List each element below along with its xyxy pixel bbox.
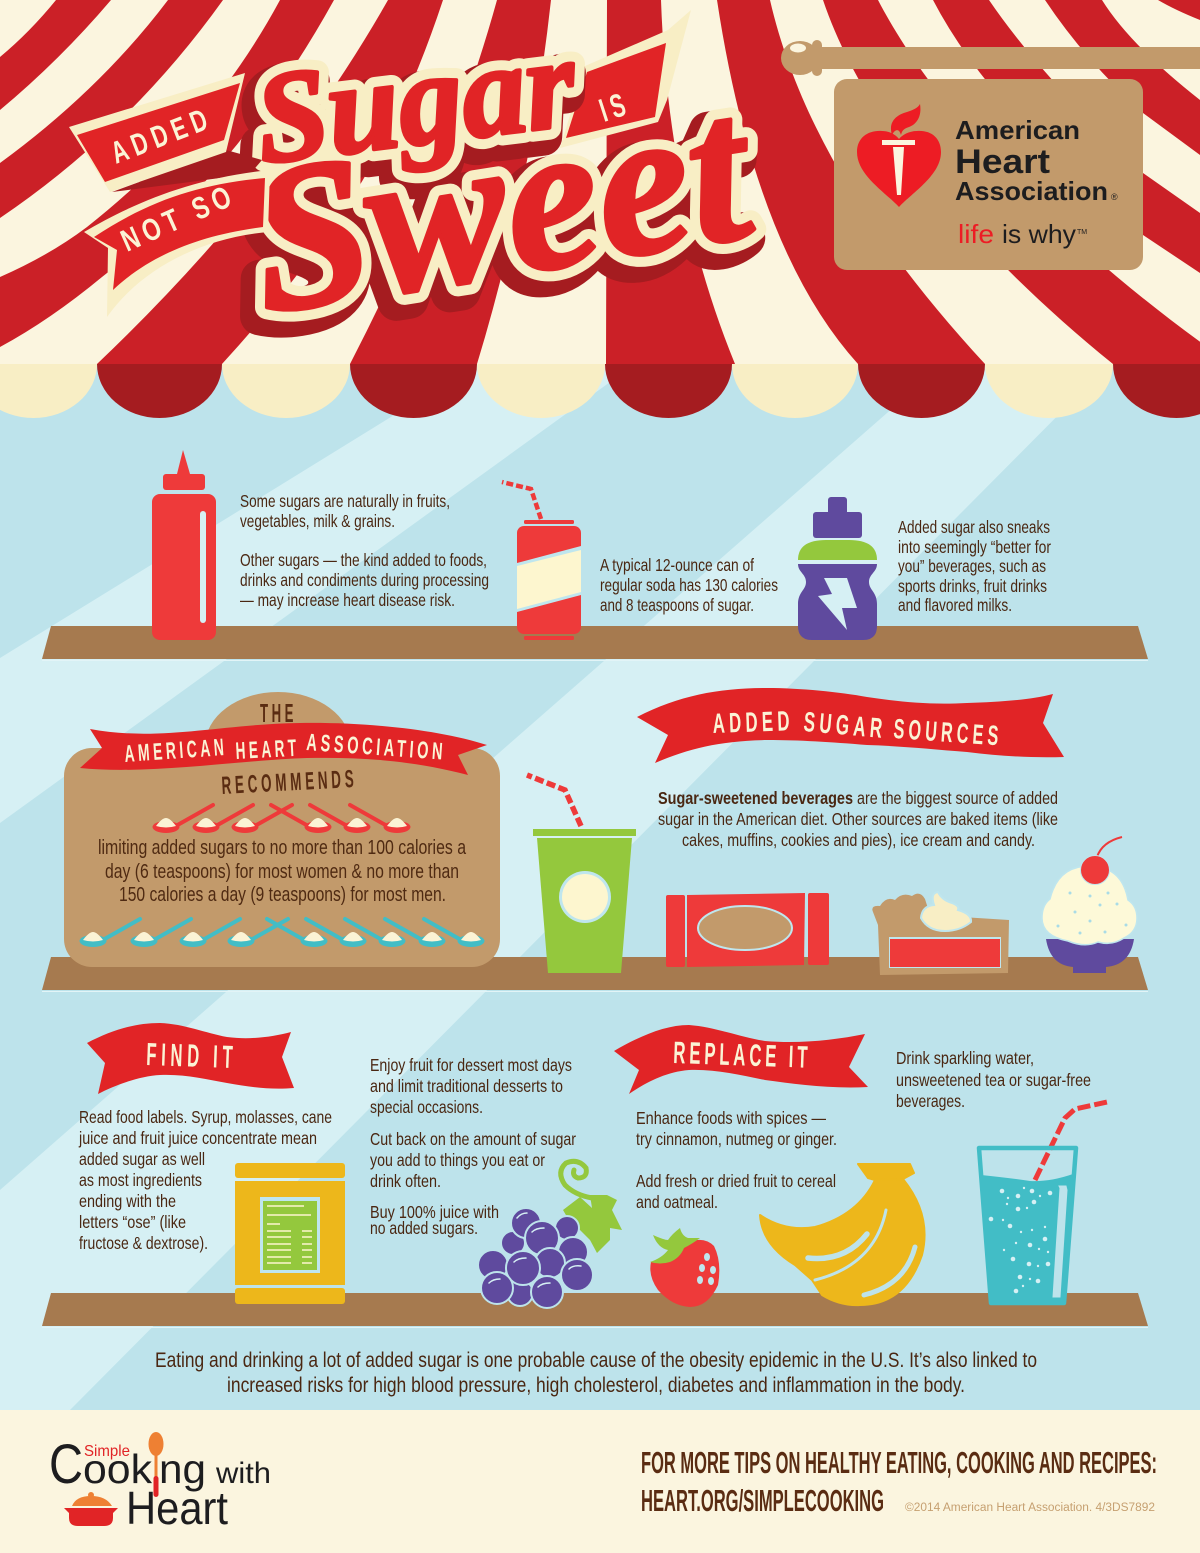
text: recommended limits: limiting added sugars to no more than 100 calories a bbox=[98, 837, 467, 859]
text: natural and other sugars: drinks and condiments during processing bbox=[240, 570, 489, 590]
call to action bbox=[641, 1445, 1157, 1518]
text: sparkling water: unsweetened tea or sugar-free bbox=[896, 1070, 1091, 1090]
text: fruit and juice tips: and limit traditional desserts to bbox=[370, 1076, 563, 1096]
banner: find it bbox=[87, 1023, 294, 1094]
copyright: ©2014 American Heart Association. 4/3DS7892 bbox=[905, 1502, 1155, 1514]
banner: added sugar sources: SUGAR bbox=[802, 706, 888, 744]
logo: simple cooking with heart bbox=[49, 1432, 271, 1534]
logo wordmark bbox=[955, 115, 1118, 206]
text: better for you beverages bbox=[898, 517, 1051, 615]
icon: ice cream sundae bbox=[1042, 837, 1137, 973]
text: sparkling water: beverages. bbox=[896, 1091, 965, 1111]
logo: simple cooking with heart: ng bbox=[159, 1446, 206, 1492]
text: natural and other sugars: vegetables, milk & grains. bbox=[240, 511, 395, 531]
heading: the: THE bbox=[260, 698, 297, 728]
text: replace it: and oatmeal. bbox=[636, 1192, 718, 1212]
logo wordmark: Association bbox=[955, 176, 1108, 206]
panel: American Heart Association sign bbox=[834, 79, 1143, 270]
awning: red and cream stripes bbox=[0, 0, 1200, 370]
banner: added: ADDED bbox=[106, 100, 217, 171]
icon: green cup with straw bbox=[527, 775, 636, 973]
logo: simple cooking with heart: Heart bbox=[126, 1482, 228, 1534]
ribbon: american heart association: HEART bbox=[235, 735, 300, 765]
icon: bananas bbox=[760, 1164, 925, 1305]
title: sugar sweet: Sugar bbox=[248, 10, 585, 192]
text: recommended limits: day (6 teaspoons) for most women & no more than bbox=[105, 861, 459, 883]
text: natural and other sugars bbox=[240, 491, 489, 610]
icon: soda can bbox=[502, 482, 581, 640]
text: added sugar sources: sugar in the American diet. Other sources are baked items (like bbox=[658, 809, 1058, 829]
icon: sports drink bottle bbox=[798, 497, 877, 640]
shelf 1 bbox=[42, 626, 1148, 661]
banner: replace it: REPLACE IT bbox=[673, 1035, 812, 1075]
logo: simple cooking with heart: ook bbox=[83, 1446, 153, 1492]
text: added sugar sources: cakes, muffins, cookies and pies), ice cream and candy. bbox=[682, 830, 1035, 850]
text: soda facts: regular soda has 130 calories bbox=[600, 575, 778, 595]
awning scallops bbox=[0, 364, 1200, 418]
text: find it: juice and fruit juice concentrate mean bbox=[78, 1128, 317, 1148]
text: closing statement: Eating and drinking a lot of added sugar is one probable cause of the obesity epidemic in the U.S. It’s also linked to bbox=[155, 1349, 1037, 1372]
text: sparkling water bbox=[896, 1048, 1091, 1111]
banner shadow bbox=[112, 150, 262, 192]
text: find it: letters “ose” (like bbox=[79, 1212, 186, 1232]
icon: food package with label bbox=[235, 1163, 345, 1304]
text: find it bbox=[78, 1107, 332, 1253]
text: replace it bbox=[636, 1108, 837, 1212]
tagline: life is why bbox=[958, 219, 1087, 249]
ribbon: american heart association bbox=[80, 723, 487, 775]
banner: not so: NOT SO bbox=[116, 177, 241, 258]
banner: is: IS bbox=[595, 84, 635, 129]
text: closing statement bbox=[155, 1349, 1037, 1397]
logo: simple cooking with heart: with bbox=[215, 1457, 271, 1490]
text: find it: Read food labels. Syrup, molasses, cane bbox=[79, 1107, 332, 1127]
icon: glass of sparkling water bbox=[979, 1102, 1107, 1305]
banner: not so bbox=[84, 170, 270, 317]
tagline: life is why: TM bbox=[1077, 229, 1087, 236]
text: find it: added sugar as well bbox=[79, 1149, 205, 1169]
text: better for you beverages: you” beverages, such as bbox=[898, 556, 1046, 576]
text: fruit and juice tips: drink often. bbox=[370, 1171, 441, 1191]
text: natural and other sugars: — may increase heart disease risk. bbox=[240, 590, 455, 610]
banner: is bbox=[560, 10, 691, 148]
text: find it: as most ingredients bbox=[79, 1170, 202, 1190]
panel: recommendation sign bbox=[64, 692, 500, 967]
banner: added bbox=[69, 73, 245, 192]
title: sugar sweet: Sweet bbox=[235, 51, 769, 358]
text: recommended limits bbox=[98, 837, 467, 906]
banner: added sugar sources: ADDED bbox=[712, 705, 794, 739]
icon: nine teal teaspoons bbox=[80, 919, 484, 947]
title: sugar sweet: Sugar bbox=[248, 10, 585, 192]
background: pale blue wall bbox=[0, 364, 1200, 1420]
heading: recommends: RECOMMENDS bbox=[221, 765, 358, 800]
text: soda facts: A typical 12-ounce can of bbox=[600, 555, 754, 575]
text: find it: ending with the bbox=[79, 1191, 176, 1211]
icon: ketchup bottle bbox=[152, 450, 216, 640]
text: replace it: try cinnamon, nutmeg or ginger. bbox=[636, 1129, 837, 1149]
logo: simple cooking with heart: Simple bbox=[84, 1443, 130, 1460]
text: better for you beverages: sports drinks, fruit drinks bbox=[898, 576, 1047, 596]
banner: find it: FIND IT bbox=[146, 1036, 238, 1075]
tagline: life is why: life bbox=[958, 219, 994, 249]
text: soda facts bbox=[600, 555, 778, 615]
text: recommended limits: 150 calories a day (9 teaspoons) for most men. bbox=[119, 884, 446, 906]
text: added sugar sources bbox=[658, 788, 1058, 850]
ribbon: american heart association: AMERICAN bbox=[124, 734, 228, 768]
text: find it: fructose & dextrose). bbox=[79, 1233, 208, 1253]
text: fruit and juice tips bbox=[370, 1055, 576, 1238]
shelf 3 bbox=[42, 1293, 1148, 1328]
title: sugar sweet: Sugar bbox=[242, 19, 579, 201]
text: better for you beverages: Added sugar also sneaks bbox=[898, 517, 1050, 537]
icon: heart and torch bbox=[857, 104, 941, 207]
text: replace it: Add fresh or dried fruit to cereal bbox=[636, 1171, 836, 1191]
text: better for you beverages: into seemingly “better for bbox=[898, 537, 1051, 557]
logo wordmark: Heart bbox=[955, 143, 1050, 181]
text: fruit and juice tips: special occasions. bbox=[370, 1097, 483, 1117]
icon: candy bar bbox=[666, 893, 829, 967]
text: fruit and juice tips: Buy 100% juice with bbox=[370, 1202, 499, 1222]
text: fruit and juice tips: Enjoy fruit for dessert most days bbox=[370, 1055, 572, 1075]
tagline: life is why: is why bbox=[1002, 219, 1076, 249]
logo wordmark: American bbox=[955, 115, 1080, 145]
banner: added sugar sources bbox=[637, 688, 1064, 763]
text: natural and other sugars: Other sugars — the kind added to foods, bbox=[240, 550, 487, 570]
text: added sugar sources: Sugar-sweetened beverages bbox=[658, 788, 853, 808]
sign rod bbox=[781, 40, 1200, 76]
text: fruit and juice tips: Cut back on the amount of sugar bbox=[370, 1129, 576, 1149]
icon: slice of pie bbox=[872, 892, 1009, 975]
text: fruit and juice tips: you add to things you eat or bbox=[370, 1150, 545, 1170]
ribbon: american heart association: ASSOCIATION bbox=[306, 729, 447, 766]
logo: simple cooking with heart: C bbox=[49, 1432, 83, 1495]
text: replace it: Enhance foods with spices — bbox=[636, 1108, 826, 1128]
footer panel bbox=[0, 1410, 1200, 1553]
text: fruit and juice tips: no added sugars. bbox=[370, 1218, 478, 1238]
text: better for you beverages: and flavored milks. bbox=[898, 595, 1012, 615]
text: closing statement: increased risks for high blood pressure, high cholesterol, diabetes and inflammation in the body. bbox=[227, 1374, 965, 1397]
icon: six red teaspoons bbox=[152, 805, 410, 833]
icon: strawberry bbox=[650, 1228, 719, 1307]
text: natural and other sugars: Some sugars are naturally in fruits, bbox=[240, 491, 450, 511]
banner: added sugar sources: SOURCES bbox=[893, 713, 1003, 752]
icon: grapes bbox=[478, 1161, 622, 1308]
title: sugar sweet: Sweet bbox=[235, 51, 769, 358]
call to action: HEART.ORG/SIMPLECOOKING bbox=[641, 1483, 884, 1518]
text: added sugar sources: are the biggest source of added bbox=[857, 788, 1058, 808]
banner: replace it bbox=[614, 1025, 868, 1094]
logo wordmark: ® bbox=[1111, 192, 1118, 202]
text: sparkling water: Drink sparkling water, bbox=[896, 1048, 1034, 1068]
title: sugar sweet: Sweet bbox=[227, 60, 761, 367]
shelf 2 bbox=[42, 957, 1148, 992]
text: soda facts: and 8 teaspoons of sugar. bbox=[600, 595, 754, 615]
